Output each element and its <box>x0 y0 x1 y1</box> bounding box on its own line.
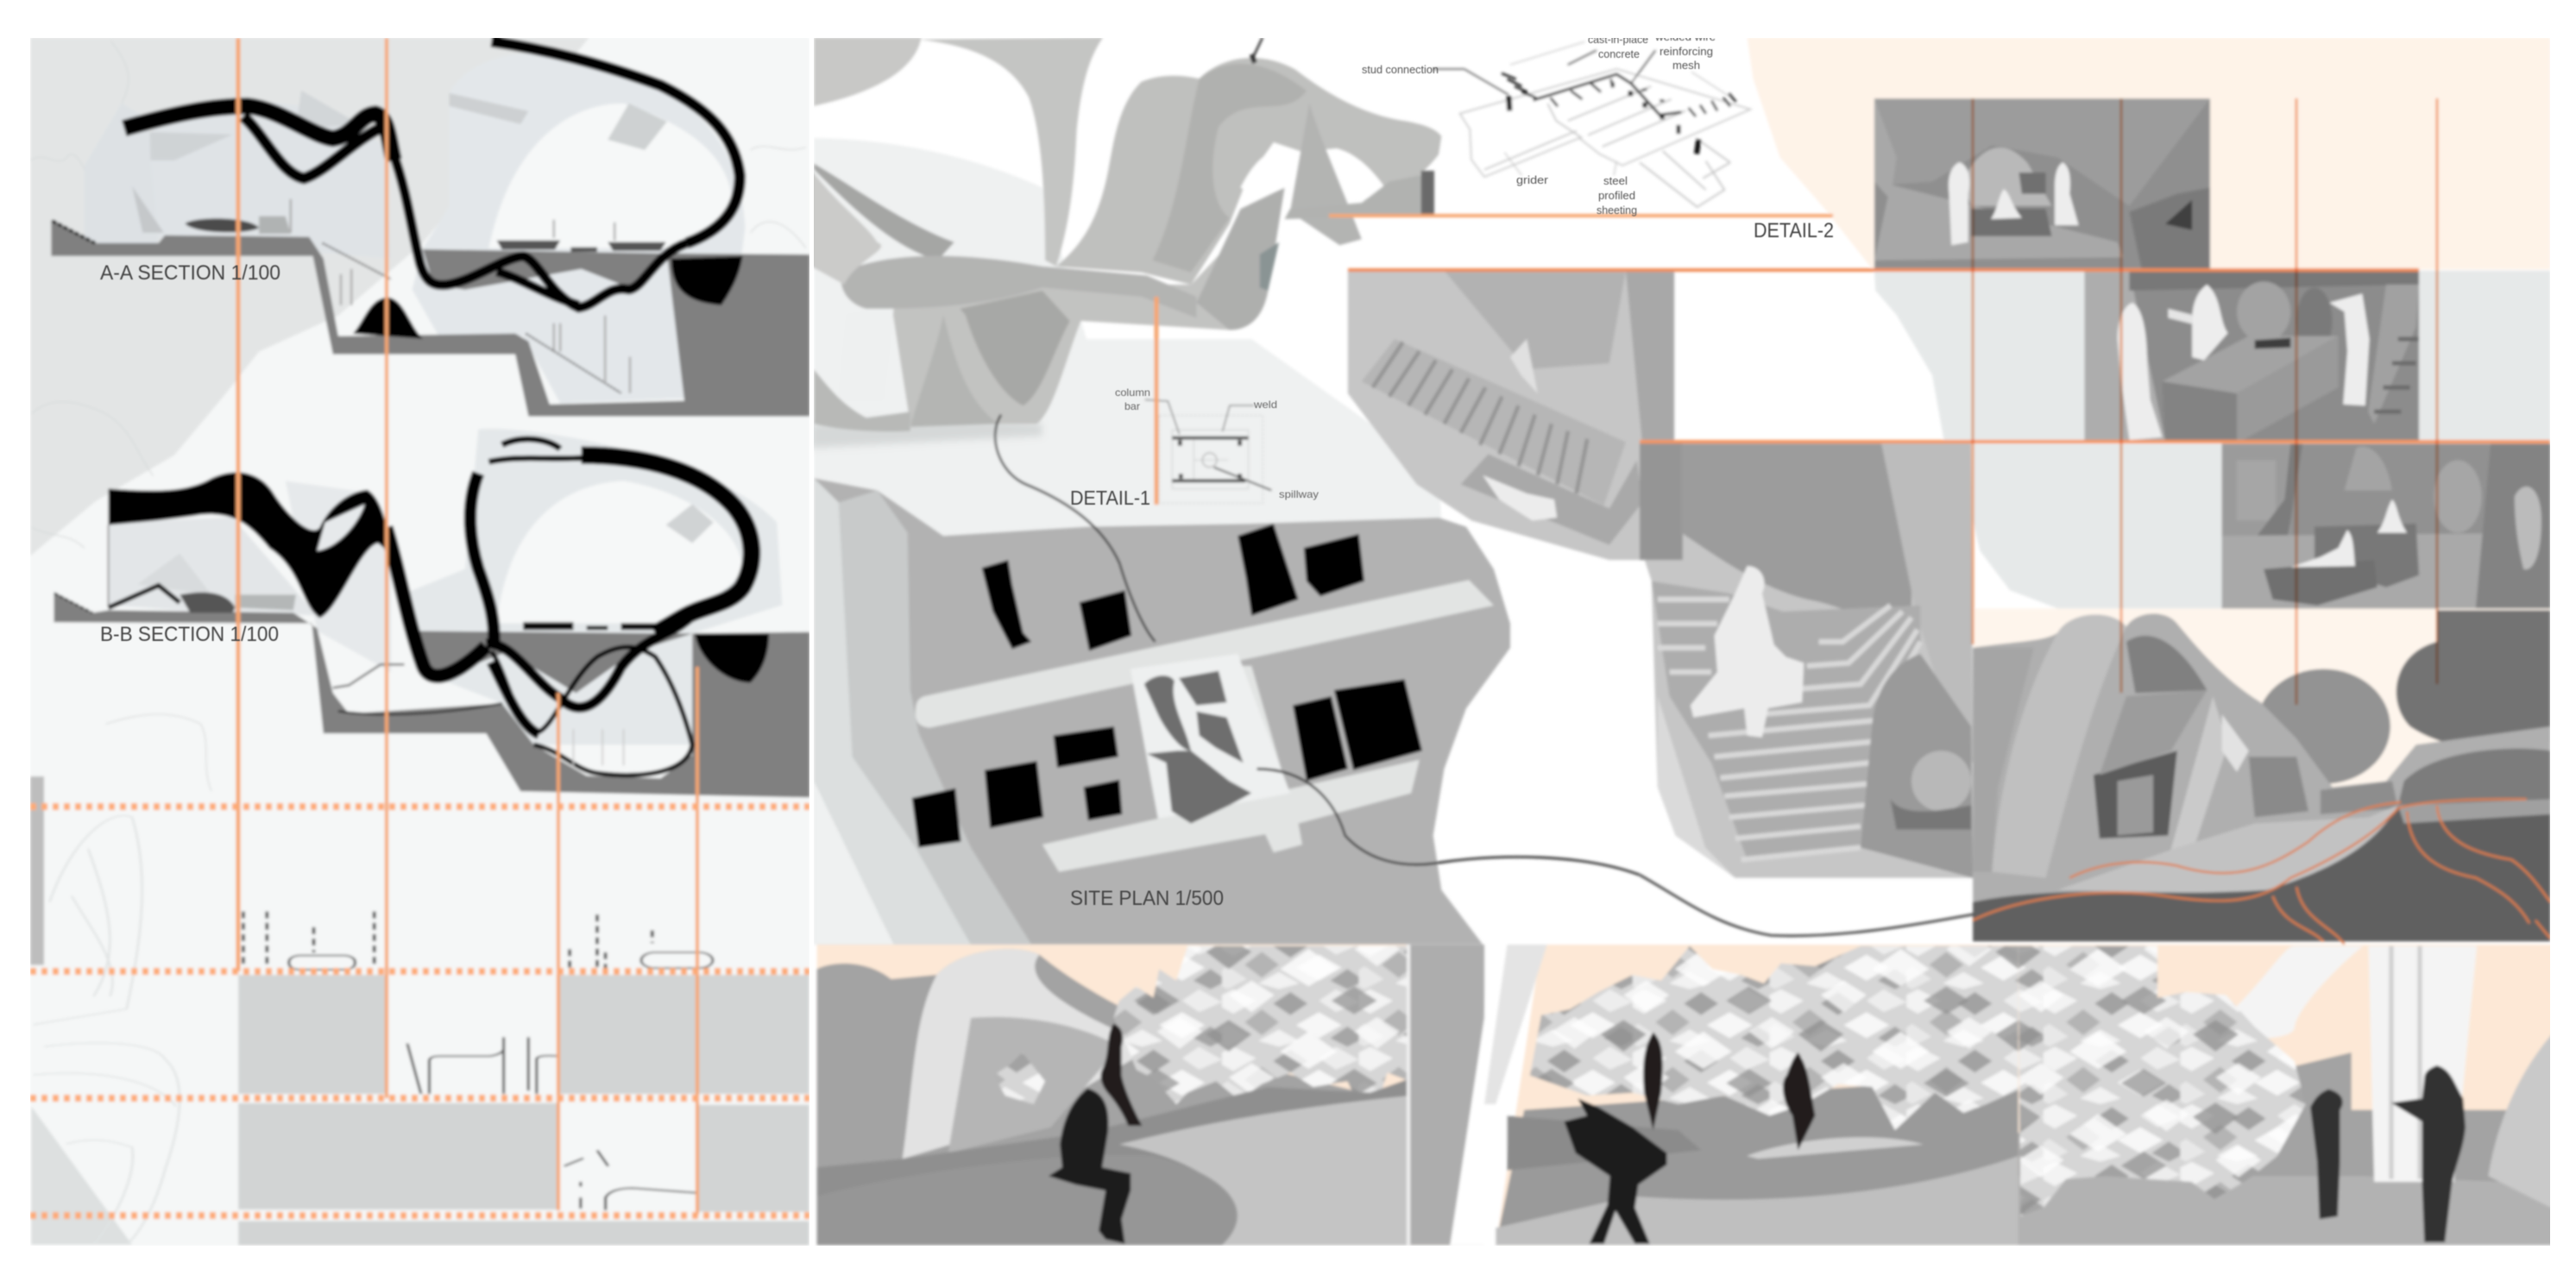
annotations: detail 2: concrete <box>1598 47 1640 60</box>
panel: bottom perspective 1 <box>817 945 1484 1245</box>
image: exterior view <box>1640 610 2550 945</box>
image: interior view, lounge <box>1874 98 2210 268</box>
main road <box>916 580 1494 728</box>
annotations: detail 2: stud connection <box>1362 63 1439 76</box>
image: main staircase view <box>1640 442 1973 878</box>
foliage <box>1113 946 1410 1128</box>
annotations: detail 1 <box>1115 386 1319 500</box>
annotations: detail 1: column <box>1115 386 1150 399</box>
chart: A-A section drawing <box>51 41 809 417</box>
panel: sections background <box>30 37 809 1246</box>
ring beam <box>841 256 1196 317</box>
neighbouring buildings <box>912 524 1422 848</box>
central folded mass <box>1056 58 1441 285</box>
curve to exterior view <box>1257 769 1640 875</box>
illustration: detail 1 column joint <box>1145 399 1271 503</box>
curve into exterior <box>1640 875 1975 936</box>
labels: drawing titles and annotations <box>100 30 1834 910</box>
annotations: detail 2: welded wire <box>1654 30 1716 43</box>
annotations: detail 1: spillway <box>1279 488 1319 500</box>
lower wall <box>888 188 1285 424</box>
label: detail 1: DETAIL-1 <box>1070 487 1150 509</box>
image: interior view, kitchen <box>2085 271 2419 440</box>
person silhouette sitting <box>1049 1089 1131 1244</box>
annotations: detail 1: bar <box>1124 400 1140 412</box>
panel: floor plan strips <box>30 776 809 1246</box>
annotations: detail 2: sheeting <box>1597 204 1637 217</box>
lower road <box>1042 760 1420 872</box>
panel: site plan <box>814 138 1510 945</box>
curve to site plan <box>995 415 1156 642</box>
foliage <box>2019 946 2306 1216</box>
person silhouettes <box>1643 1033 1815 1150</box>
annotations: detail 1: weld <box>1253 399 1277 411</box>
label: site plan: SITE PLAN 1/500 <box>1070 887 1224 910</box>
person silhouette with bags <box>1691 566 1804 738</box>
chart: B-B section drawing <box>54 429 809 797</box>
label: A-A section: A-A SECTION 1/100 <box>100 261 280 285</box>
image: upper staircase view <box>1348 271 1674 560</box>
annotations: detail 2: cast-in-place <box>1588 33 1648 46</box>
annotations: detail 2 <box>1362 30 1716 217</box>
image: interior view, bedroom <box>2222 443 2550 608</box>
person silhouettes with cameras <box>2310 1065 2466 1242</box>
annotations: detail 2: grider <box>1516 173 1549 186</box>
arch band <box>918 38 1103 267</box>
foliage <box>1530 946 2019 1130</box>
annotations: detail 2: mesh <box>1672 59 1700 72</box>
label: detail 2: DETAIL-2 <box>1754 219 1834 242</box>
panel: bottom perspective 3 <box>2019 945 2573 1245</box>
panel: bottom perspective 2 <box>1450 945 2019 1245</box>
photographer silhouette <box>1565 1098 1667 1244</box>
tent fold <box>1290 103 1362 245</box>
site lot <box>1131 654 1290 819</box>
person silhouette standing <box>1101 1024 1142 1126</box>
annotations: detail 2: steel <box>1603 174 1628 187</box>
orange contour lines <box>1973 799 2550 945</box>
annotations: detail 2: reinforcing <box>1660 45 1713 58</box>
panel: peach and grey backdrops <box>1748 38 2550 790</box>
building footprint <box>1144 671 1251 823</box>
label: B-B section: B-B SECTION 1/100 <box>100 623 279 646</box>
annotations: detail 2: profiled <box>1598 189 1635 202</box>
side road <box>1235 666 1288 795</box>
illustration: concrete shell building <box>811 38 1640 875</box>
illustration: detail 2 composite floor <box>1433 41 1750 207</box>
